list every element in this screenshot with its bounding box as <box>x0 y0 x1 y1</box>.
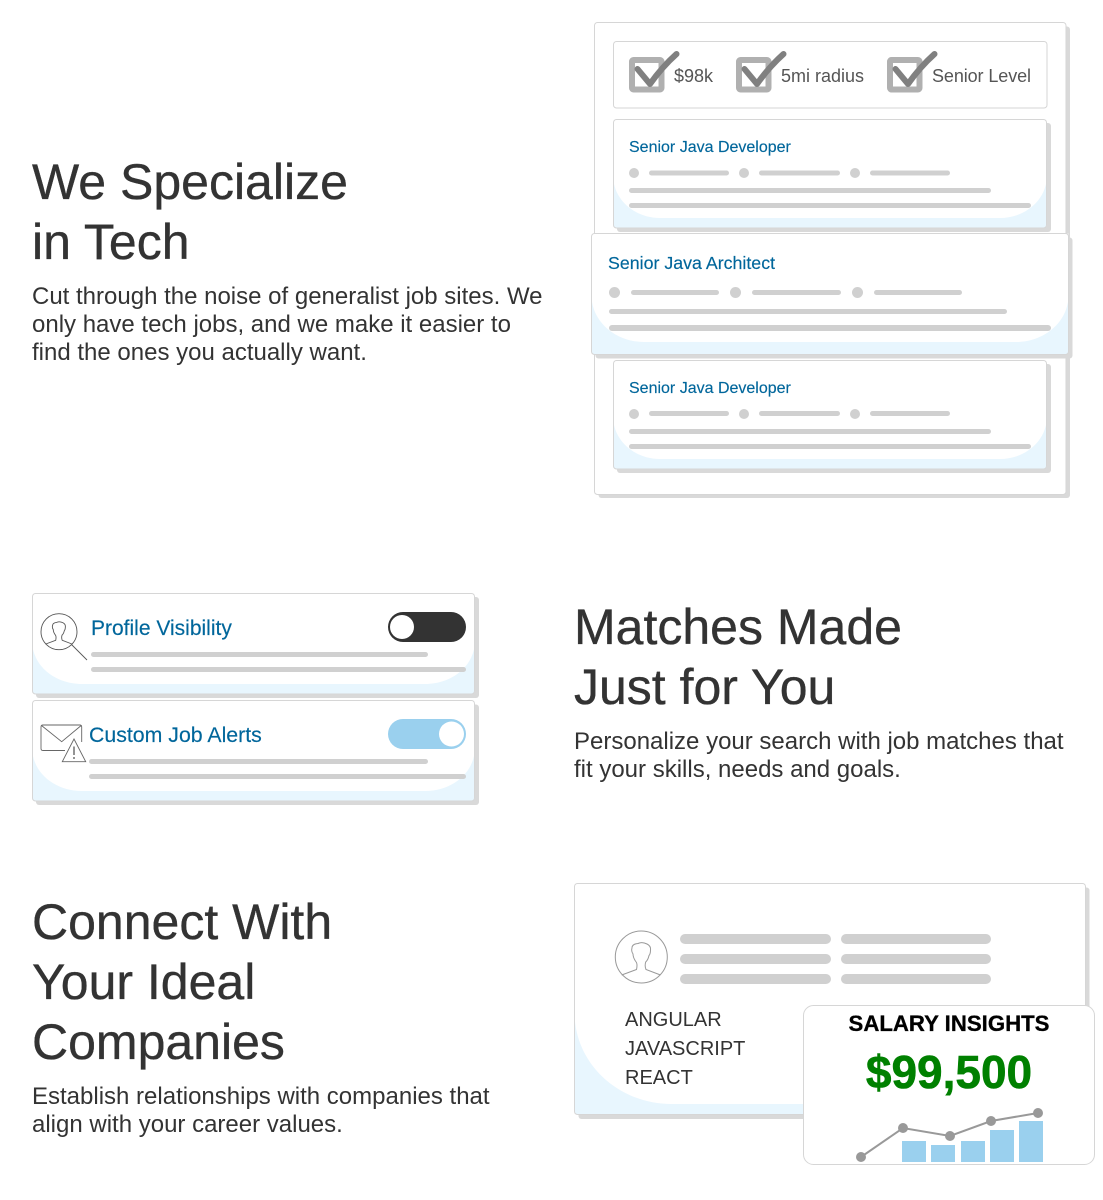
section 2 heading: Matches Made Just for You: Matches Made <box>574 599 902 655</box>
icon: profile search <box>41 614 87 660</box>
panel: job search results <box>592 22 1072 498</box>
panel: salary insights <box>804 1006 1094 1164</box>
section 2 heading: Matches Made Just for You <box>574 599 902 715</box>
panel: candidate profile <box>574 884 1090 1119</box>
bar and line chart <box>856 1108 1043 1162</box>
section 3 heading: Connect With Your Ideal Companies <box>32 894 332 1070</box>
section 1 heading: We Specialize in Tech: in Tech <box>32 214 190 270</box>
toggle: off <box>388 612 466 642</box>
section 3 body text: align with your career values. <box>32 1111 343 1138</box>
section 1 body text: Cut through the noise of generalist job sites. We <box>32 283 543 310</box>
icon: envelope alert <box>41 725 86 762</box>
salary title: SALARY INSIGHTS <box>849 1011 1049 1036</box>
job card: Senior Java Developer (top): Senior Java Developer <box>629 139 792 156</box>
section 1 body text: only have tech jobs, and we make it easier to <box>32 311 511 338</box>
section 3 heading: Connect With Your Ideal Companies: Companies <box>32 1014 285 1070</box>
filter: 5mi radius <box>739 54 864 90</box>
section 1 body text: find the ones you actually want. <box>32 339 367 366</box>
section 3 heading: Connect With Your Ideal Companies: Your Ideal <box>32 954 255 1010</box>
filter bar <box>614 42 1047 108</box>
salary value: $99,500 <box>866 1046 1032 1098</box>
section 1 heading: We Specialize in Tech: We Specialize <box>32 154 348 210</box>
filter: $98k: $98k <box>674 66 714 86</box>
skills list: ANGULAR <box>625 1009 722 1031</box>
skills list: JAVASCRIPT <box>625 1038 745 1060</box>
skills list <box>625 1009 745 1089</box>
card: Profile Visibility <box>32 593 479 698</box>
icon: avatar <box>615 931 667 983</box>
job card: Senior Java Developer (bottom) <box>613 360 1051 473</box>
profile placeholder lines <box>680 934 991 984</box>
panel: settings cards <box>32 593 479 805</box>
card: Custom Job Alerts <box>32 700 479 805</box>
skills list: REACT <box>625 1067 693 1089</box>
card: Profile Visibility: Profile Visibility <box>91 617 232 640</box>
job card: Senior Java Architect (highlighted) <box>592 234 1072 358</box>
section 2 heading: Matches Made Just for You: Just for You <box>574 659 835 715</box>
section 2 body text: fit your skills, needs and goals. <box>574 756 901 783</box>
filter: $98k <box>632 54 714 90</box>
section 3 heading: Connect With Your Ideal Companies: Connect With <box>32 894 332 950</box>
filter: Senior Level: Senior Level <box>932 66 1031 86</box>
section 2 body text: Personalize your search with job matches that <box>574 728 1064 755</box>
section 1 body text <box>32 283 543 366</box>
section 3 body text: Establish relationships with companies that <box>32 1083 490 1110</box>
job card: Senior Java Architect (highlighted): Senior Java Architect <box>608 253 775 273</box>
card: Custom Job Alerts: Custom Job Alerts <box>89 723 262 747</box>
section 2 body text <box>574 728 1064 783</box>
job card: Senior Java Developer (top) <box>613 119 1051 232</box>
toggle: on <box>388 719 466 749</box>
section 3 body text <box>32 1083 490 1138</box>
filter: Senior Level <box>890 54 1031 90</box>
job card: Senior Java Developer (bottom): Senior Java Developer <box>629 380 792 397</box>
section 1 heading: We Specialize in Tech <box>32 154 348 270</box>
filter: 5mi radius: 5mi radius <box>781 66 864 86</box>
